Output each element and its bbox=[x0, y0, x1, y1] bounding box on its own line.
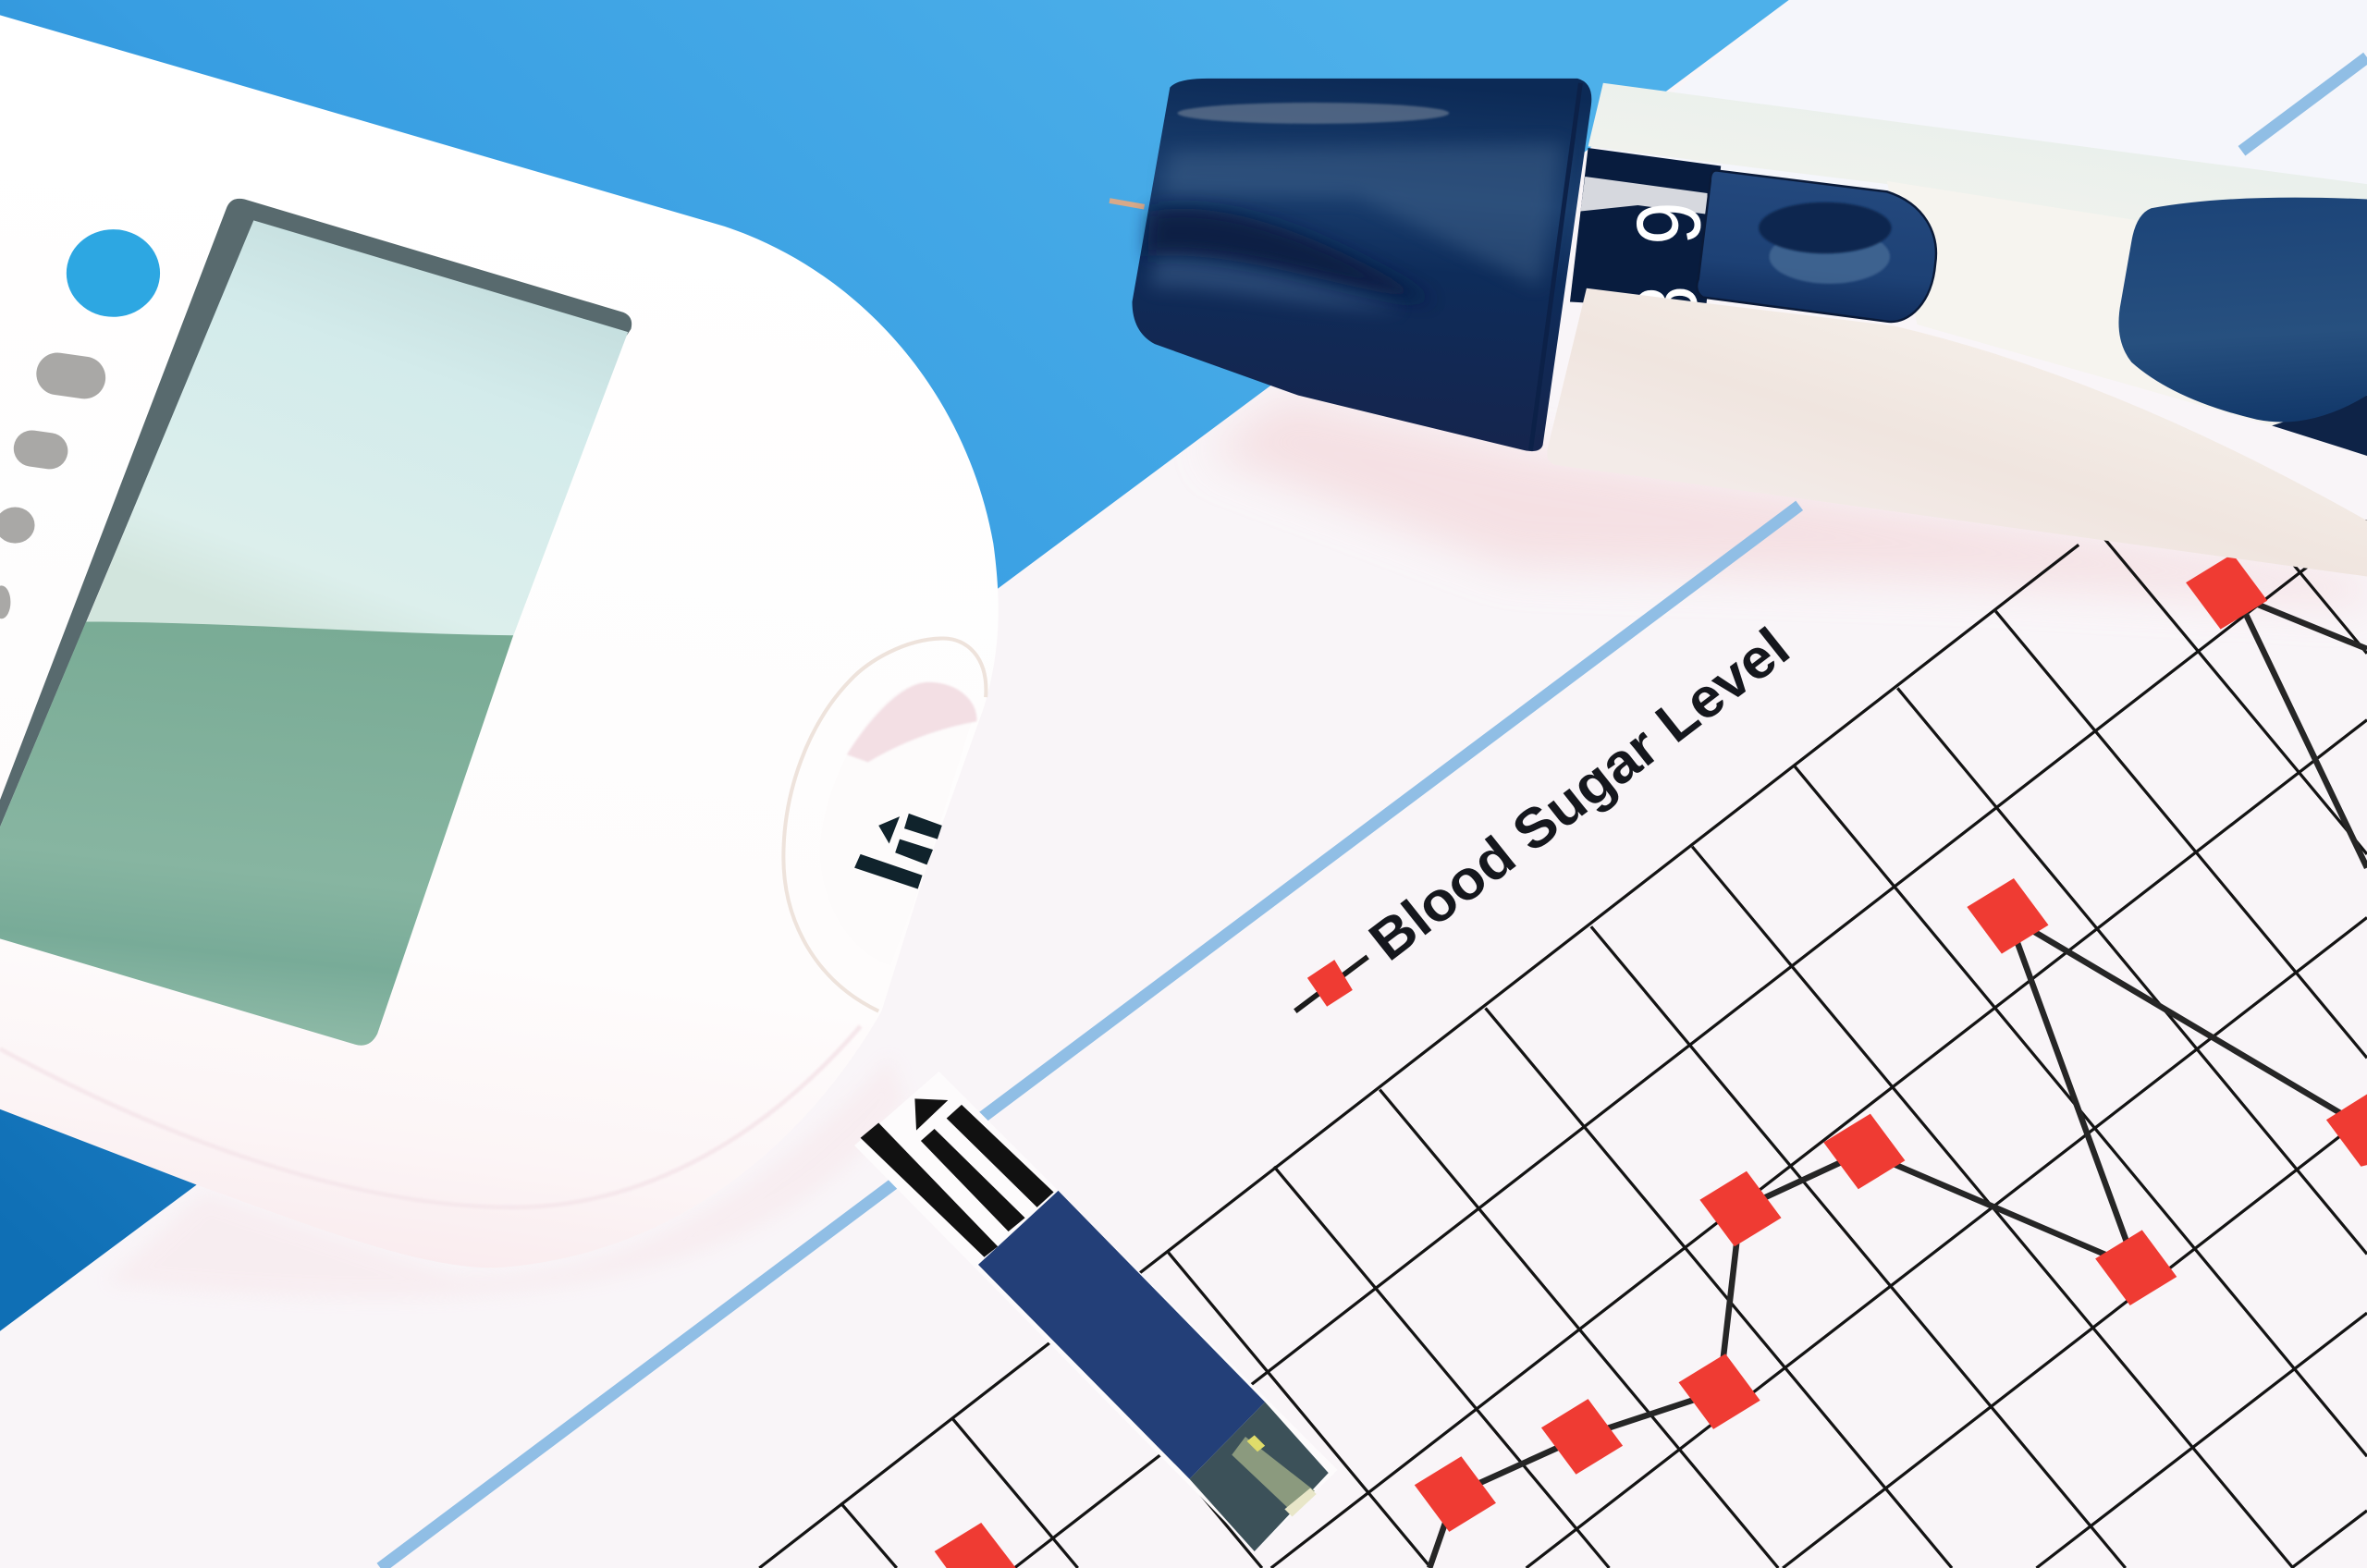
strip blue band bbox=[978, 1191, 1265, 1479]
meter screen bbox=[0, 199, 632, 1046]
pink shadow under meter bbox=[105, 1057, 906, 1298]
screen lower bbox=[0, 622, 513, 1046]
glucose meter bbox=[0, 15, 999, 1268]
port icon bbox=[854, 814, 942, 888]
chart legend bbox=[1295, 616, 1801, 1011]
strip contacts bbox=[1232, 1435, 1317, 1517]
pen cap bbox=[1132, 79, 1591, 451]
screen frame bbox=[0, 199, 632, 827]
power indicator bbox=[67, 229, 160, 317]
chart grid bbox=[759, 453, 2367, 1568]
slider button bbox=[1697, 170, 1936, 322]
chart data line bbox=[1429, 596, 2367, 1568]
strip electrode bbox=[1190, 1402, 1329, 1551]
test strip bbox=[854, 1072, 1338, 1551]
port rim bbox=[783, 638, 986, 1011]
pen lower body bbox=[1547, 288, 2367, 577]
legend marker bbox=[1295, 957, 1367, 1011]
legend label: Blood Sugar Level bbox=[1357, 616, 1801, 973]
dial highlight bbox=[1580, 177, 1708, 214]
lancet tip bbox=[1110, 201, 1145, 207]
cap highlight middle bbox=[1162, 143, 1563, 287]
cap highlight top bbox=[1177, 103, 1449, 124]
pen middle body bbox=[1887, 181, 2367, 453]
dimple highlight bbox=[1769, 229, 1890, 284]
dial digit nine: 9 bbox=[1619, 202, 1720, 245]
release button bbox=[2118, 198, 2367, 456]
upper right paper bbox=[1600, 0, 2367, 301]
lancing pen bbox=[1110, 79, 2367, 577]
dial digit eight: 8 bbox=[1617, 286, 1716, 327]
strip port bbox=[783, 638, 986, 1011]
chart data points bbox=[935, 554, 2367, 1568]
meter body bbox=[0, 15, 999, 1268]
strip base bbox=[854, 1072, 1338, 1551]
screen upper reflection bbox=[0, 220, 628, 830]
pen upper body bbox=[1588, 83, 2367, 272]
port cavity bbox=[847, 682, 976, 762]
port well bbox=[820, 681, 974, 966]
cap rim bbox=[1531, 83, 1580, 449]
pen slot bbox=[1570, 148, 1721, 310]
blue desk surface bbox=[0, 0, 1789, 1331]
cap lower sheen bbox=[1150, 256, 1404, 310]
light blue rule upper bbox=[2241, 57, 2367, 151]
cap dark band bbox=[1147, 209, 1434, 301]
blood sugar chart bbox=[759, 453, 2367, 1568]
meter seam bbox=[0, 1026, 861, 1207]
indicator pills bbox=[0, 350, 108, 619]
strip arrow bbox=[914, 1098, 948, 1131]
light blue rule lower bbox=[380, 506, 1799, 1568]
pink shadow under pen bbox=[1208, 396, 2367, 604]
slider dimple bbox=[1759, 202, 1892, 253]
strip barcode stripes bbox=[861, 1105, 1054, 1257]
